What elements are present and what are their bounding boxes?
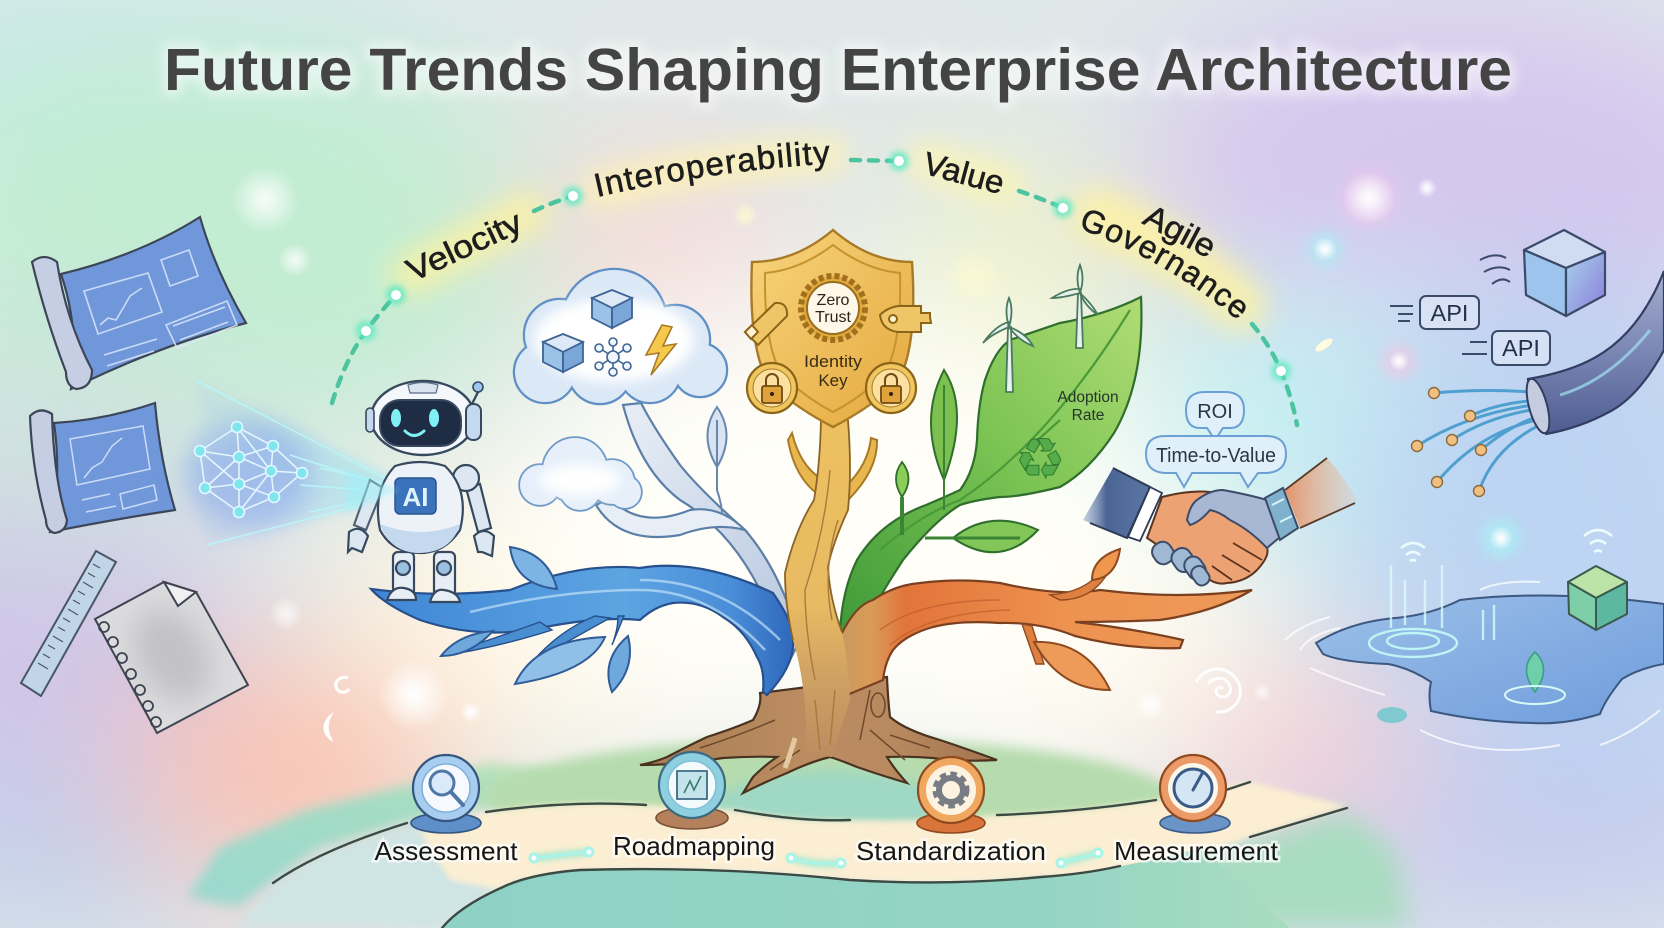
teal pool	[442, 848, 1290, 928]
stone	[1377, 707, 1407, 723]
panel: AI robot with neural beam	[180, 380, 393, 545]
hill	[485, 738, 1175, 862]
head	[366, 381, 483, 455]
title: Future Trends Shaping Enterprise Architecture	[164, 37, 1512, 103]
panel: blueprints and paper tools	[21, 217, 248, 733]
leaves	[510, 547, 557, 589]
pale wash below left path line	[235, 815, 575, 928]
panel: ROI handshake	[1083, 392, 1357, 588]
human hand	[1147, 492, 1268, 584]
panel: zero trust shield	[745, 230, 931, 427]
branch: white cloud	[596, 403, 800, 660]
icon: container cube left	[543, 334, 583, 372]
label: Agile: Agile	[1138, 197, 1222, 265]
zero trust medallion	[801, 276, 865, 340]
tree	[187, 265, 1410, 928]
AI badge: AI	[402, 482, 428, 512]
AI badge	[395, 478, 436, 514]
label: Identity Key: Key	[818, 371, 848, 390]
mint wash right	[1000, 812, 1410, 928]
icon: blueprint large	[32, 217, 246, 389]
label glows	[410, 155, 1240, 305]
icon: wrench key	[745, 303, 787, 345]
robot hand	[1187, 488, 1298, 548]
icon: neural network	[194, 422, 308, 518]
trunk base	[640, 677, 997, 793]
branch: green leaf	[840, 265, 1141, 636]
bubble: ROI: ROI	[1197, 401, 1233, 423]
branch: blue	[371, 547, 793, 695]
process steps	[374, 752, 1279, 867]
ripples	[1285, 582, 1660, 750]
small cloud	[520, 438, 641, 510]
zero trust medallion: Trust	[815, 309, 851, 326]
arc of trend labels	[330, 126, 1300, 428]
icon: signal waves	[1480, 255, 1510, 284]
step: Measurement	[1114, 755, 1279, 866]
big cloud	[515, 270, 726, 403]
icon: recycle: ♻	[1015, 427, 1065, 492]
icon: cable	[1522, 271, 1664, 435]
beam over chest	[346, 470, 398, 512]
water	[1316, 596, 1664, 723]
label: Governance: Governance	[1082, 210, 1246, 318]
icon: lock coin right	[866, 363, 916, 413]
sparkles	[231, 166, 1521, 742]
API tag 1: API	[1431, 300, 1468, 326]
branch: orange	[835, 549, 1252, 700]
step: Assessment	[374, 755, 518, 866]
label: Identity Key	[804, 352, 863, 390]
light beam	[180, 380, 393, 545]
torso	[378, 462, 463, 553]
panel: API cube and fiber cable	[1390, 230, 1664, 496]
bubble: Time-to-Value: Time-to-Value	[1156, 445, 1276, 467]
robot	[346, 381, 494, 602]
connectors	[530, 848, 1102, 867]
label: Identity Key: Identity	[804, 352, 863, 371]
light columns	[1391, 565, 1494, 640]
shield body	[751, 230, 913, 427]
arms	[348, 465, 494, 556]
cream band	[420, 782, 1347, 890]
human arm	[1285, 458, 1357, 528]
left hill wedge	[187, 763, 620, 907]
step: Roadmapping: Roadmapping	[613, 831, 775, 861]
icon: wifi right	[1584, 530, 1612, 552]
step: Roadmapping	[613, 752, 775, 861]
step: Assessment: Assessment	[374, 836, 518, 866]
icon: notebook	[95, 582, 248, 733]
API tag 1	[1390, 296, 1479, 329]
dashed arc	[332, 160, 1297, 425]
API tag 2	[1462, 331, 1550, 365]
step: Measurement: Measurement	[1114, 836, 1279, 866]
twigs	[441, 616, 624, 662]
icon: key right	[880, 306, 931, 332]
label: Velocity: Velocity	[401, 204, 527, 288]
icon: lightning	[646, 325, 676, 375]
step: Standardization	[856, 757, 1046, 866]
branch: gold trunk and twigs	[785, 420, 877, 757]
path lines	[273, 782, 1347, 883]
bubble: Time-to-Value	[1146, 436, 1286, 487]
label: Adoption Rate: Adoption	[1057, 389, 1119, 406]
panel: data puddle	[1285, 530, 1664, 750]
panel: cloud with containers	[515, 270, 726, 510]
zero trust medallion: Zero	[817, 292, 850, 309]
legs	[387, 552, 460, 602]
branch: green leaf: Rate	[1072, 407, 1104, 424]
API tag 2: API	[1502, 335, 1540, 361]
icon: ruler	[21, 551, 116, 696]
label: Value: Value	[920, 145, 1008, 201]
icon: wind turbines	[983, 265, 1098, 392]
suit sleeve	[1083, 468, 1150, 538]
title: Future Trends Shaping Enterprise Architecture	[164, 37, 1512, 103]
step: Standardization: Standardization	[856, 836, 1046, 866]
icon: water leaf	[1505, 652, 1565, 704]
robot fingers	[1148, 538, 1212, 588]
icon: blueprint small	[30, 403, 175, 533]
icon: fiber bundle	[1412, 388, 1546, 496]
bubble: ROI	[1186, 392, 1244, 440]
icon: network	[595, 338, 631, 376]
icon: wifi left	[1401, 543, 1425, 561]
icon: cube	[1524, 230, 1605, 316]
icon: container cube top	[592, 290, 632, 328]
label: Interoperability: Interoperability	[594, 142, 830, 197]
arc nodes	[356, 151, 1291, 381]
ground and path	[187, 738, 1410, 928]
ripple rings	[1369, 629, 1457, 657]
icon: green cube	[1568, 566, 1627, 630]
icon: lock coin left	[747, 363, 797, 413]
